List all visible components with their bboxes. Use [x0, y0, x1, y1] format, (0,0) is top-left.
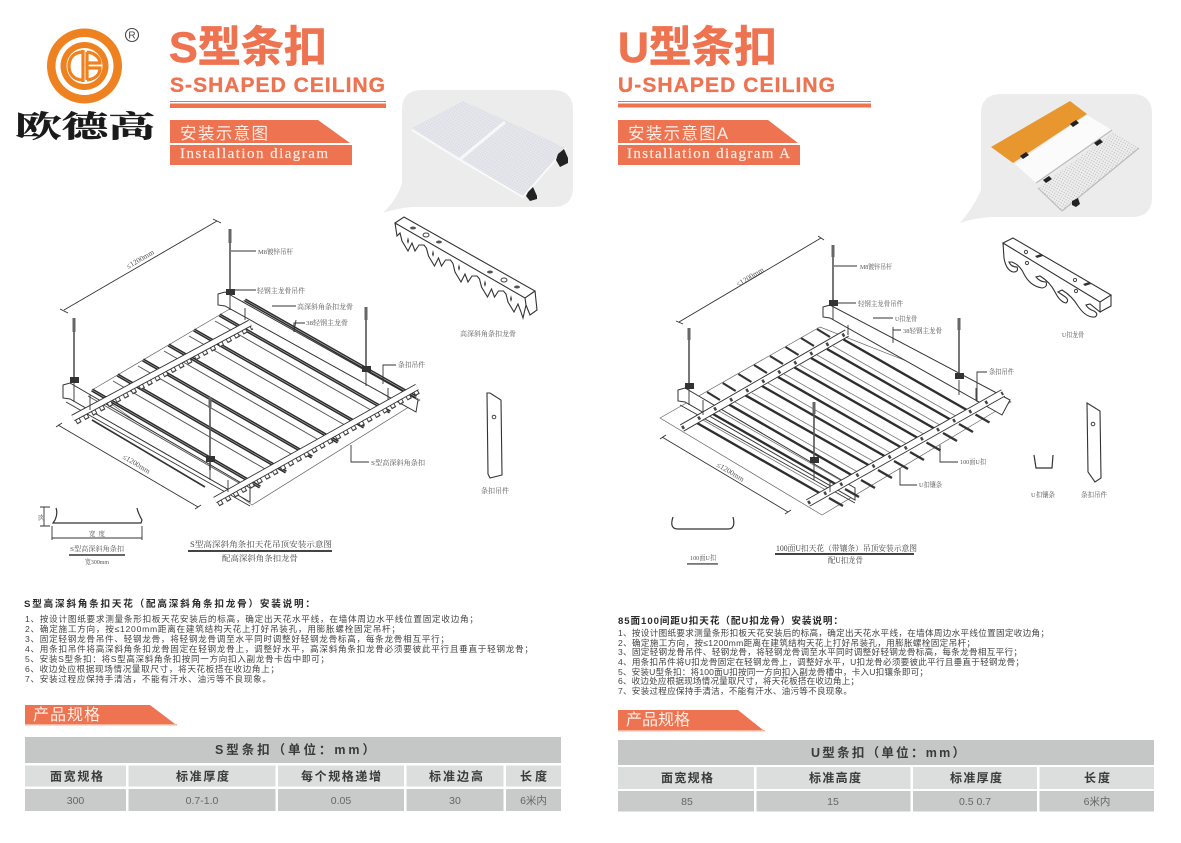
banner: installation diagram A: Installation diagram A	[627, 146, 790, 162]
subtitle: U-SHAPED CEILING: U-SHAPED CEILING	[618, 74, 835, 97]
isometric diagram: U ceiling: ≤1200mm	[715, 460, 746, 484]
labels: S diagram: 38轻钢主龙骨	[306, 318, 348, 327]
table: S specs	[25, 737, 561, 811]
instructions: S: S型高深斜角条扣天花（配高深斜角条扣龙骨）安装说明：	[24, 598, 315, 610]
profile: S strip	[38, 507, 142, 566]
heading rules U	[618, 101, 871, 108]
table: U specs: 15	[827, 796, 839, 808]
front carrier	[678, 388, 855, 500]
dimension lines	[660, 236, 824, 514]
banner: 产品规格 S	[25, 705, 177, 726]
instructions: S: 5、安装S型条扣：将S型高深斜角条扣按同一方向扣入副龙骨卡齿中即可；	[25, 653, 329, 664]
banner: 产品规格 U: 产品规格	[626, 711, 690, 729]
caption: S diagram: S型高深斜角条扣天花吊顶安装示意图	[190, 539, 332, 549]
title: U型条扣: U型条扣	[618, 24, 777, 72]
table: S specs: 0.05	[331, 795, 351, 807]
table: S specs: 标准边高	[429, 768, 483, 784]
instructions: U: 2、确定施工方向，按≤1200mm距离在建筑结构天花上打好吊装孔，用膨胀螺栓固定吊杆；	[618, 637, 975, 648]
strips	[92, 300, 416, 487]
labels: S diagram	[257, 247, 425, 467]
stubs	[829, 414, 990, 506]
labels: U diagram: 38轻钢主龙骨	[903, 326, 942, 335]
connector keel: U	[1003, 238, 1111, 339]
logo: 欧德高	[15, 28, 155, 146]
logo: 欧德高: R	[128, 31, 136, 42]
instructions: U: 3、固定轻钢龙骨吊件、轻钢龙骨，将轻钢龙骨调至水平同时调整好轻钢龙骨标高，每条龙骨相互平行；	[618, 646, 1022, 657]
labels: U diagram: U扣龙骨	[895, 314, 917, 323]
table: U specs: 长度	[1084, 770, 1110, 785]
labels: S diagram: 轻钢主龙骨吊件	[257, 286, 305, 295]
caption: S diagram	[188, 539, 332, 563]
labels: U diagram: 100面U扣	[960, 457, 986, 466]
labels: U diagram: 条扣吊件	[989, 367, 1014, 376]
instructions: U: 4、用条扣吊件将U扣龙骨固定在轻钢龙骨上，调整好水平，U扣龙骨必须要彼此平行且垂直于轻钢龙骨；	[618, 656, 1024, 667]
banner: installation diagram: 安装示意图	[180, 124, 268, 143]
isometric diagram: U ceiling: ≤1200mm	[734, 265, 766, 289]
isometric diagram: S ceiling	[56, 219, 420, 509]
caption: U diagram	[775, 543, 917, 565]
table: U specs: 0.5 0.7	[959, 796, 991, 808]
table: U specs: U型条扣（单位：mm）	[811, 745, 965, 760]
instructions: S: 1、按设计图纸要求测量条形扣板天花安装后的标高，确定出天花水平线，在墙体周边水平线位置固定收边角；	[25, 613, 478, 624]
photo bubble: U panels	[960, 94, 1152, 223]
photo bubble: S panel	[383, 90, 573, 213]
front carrier	[63, 383, 250, 502]
back carrier	[218, 292, 418, 412]
profile: S strip: 肉	[38, 513, 45, 522]
table: S specs: 0.7-1.0	[186, 795, 218, 807]
instructions: S: 3、固定轻钢龙骨吊件、轻钢龙骨，将轻钢龙骨调至水平同时调整好轻钢龙骨标高，每条龙骨相互平行；	[25, 633, 449, 644]
instructions: S: 7、安装过程应保持手清洁，不能有汗水、油污等不良现象。	[25, 673, 271, 684]
isometric diagram: U ceiling	[660, 236, 1011, 515]
labels: S diagram: 高深斜角条扣龙骨	[297, 302, 353, 311]
table: U specs: 85	[681, 796, 693, 808]
dimension lines	[56, 219, 221, 509]
table: U specs: 标准厚度	[950, 770, 1002, 785]
table: S specs: 300	[67, 795, 84, 807]
table: U specs	[618, 740, 1154, 812]
heading rules	[170, 101, 386, 108]
table: S specs: 长度	[520, 768, 547, 784]
instructions: U: 5、安装U型条扣：将100面U扣按同一方向扣入副龙骨槽中，卡入U扣镶条即可；	[618, 666, 928, 677]
rods	[689, 245, 959, 465]
labels: S diagram: S型高深斜角条扣	[371, 458, 425, 467]
instructions: U: 1、按设计图纸要求测量条形扣板天花安装后的标高，确定出天花水平线，在墙体周边水平线位置固定收边角；	[618, 627, 1049, 638]
keels	[76, 327, 419, 504]
instructions: U: 6、收边处应根据现场情况量取尺寸，将天花板搭在收边角上；	[618, 675, 859, 686]
instructions: S: 4、用条扣吊件将高深斜角条扣龙骨固定在轻钢龙骨上，调整好水平，高深斜角条扣龙骨必须要彼此平行且垂直于轻钢龙骨；	[25, 643, 533, 654]
instructions: S: 6、收边处应根据现场情况量取尺寸，将天花板搭在收边角上；	[25, 663, 279, 674]
subtitle: S-SHAPED CEILING: S-SHAPED CEILING	[170, 74, 385, 97]
hanger piece: S: 条扣吊件	[481, 486, 509, 495]
profile: S strip: 宽300mm	[85, 557, 110, 566]
title: S型条扣: S型条扣	[169, 24, 327, 72]
labels: S diagram: M8镀锌吊杆	[258, 247, 293, 256]
profile: U strip: 100面U扣	[690, 553, 716, 562]
labels: U diagram: U扣镶条	[919, 480, 942, 489]
connector keel: S	[395, 217, 537, 338]
banner: installation diagram: Installation diagram	[180, 146, 328, 162]
table: S specs: 面宽规格	[50, 768, 103, 784]
U clip strip: U扣镶条	[1031, 490, 1055, 499]
hanger rods	[74, 230, 366, 470]
hanger piece: U: 条扣吊件	[1081, 490, 1107, 499]
instructions: S	[24, 598, 533, 684]
connector keel: U: U扣龙骨	[1062, 330, 1084, 339]
caption: S diagram: 配高深斜角条扣龙骨	[222, 553, 298, 563]
table: U specs: 面宽规格	[661, 770, 713, 785]
hanger piece: U	[1081, 403, 1107, 499]
leaders	[834, 266, 987, 485]
strips	[697, 340, 970, 495]
banner: installation diagram	[170, 120, 352, 165]
table: S specs: S型条扣（单位：mm）	[215, 742, 375, 757]
logo: 欧德高: 欧德高	[15, 102, 155, 146]
connector keel: S: 高深斜角条扣龙骨	[460, 329, 516, 338]
profile: S strip: S型高深斜角条扣	[70, 544, 124, 553]
instructions: U	[618, 615, 1049, 696]
caption: U diagram: 配U扣龙骨	[828, 555, 863, 565]
table: S specs: 30	[449, 795, 461, 807]
instructions: U: 7、安装过程应保持手清洁，不能有汗水、油污等不良现象。	[618, 685, 852, 696]
banner: installation diagram A: 安装示意图A	[628, 124, 728, 143]
table: S specs: 6米内	[520, 794, 547, 807]
banner: 产品规格 S: 产品规格	[33, 706, 100, 724]
banner: 产品规格 U	[618, 710, 765, 732]
instructions: S: 2、确定施工方向，按≤1200mm距离在建筑结构天花上打好吊装孔，用膨胀螺栓固定吊杆；	[25, 623, 400, 634]
table: S specs: 每个规格递增	[301, 768, 381, 784]
table: S specs: 标准厚度	[176, 768, 229, 784]
isometric diagram: S ceiling: ≤1200mm	[121, 452, 152, 476]
isometric diagram: S ceiling: ≤1200mm	[124, 247, 156, 271]
table: U specs: 6米内	[1084, 795, 1110, 808]
labels: U diagram	[858, 262, 1014, 489]
keels	[682, 333, 1003, 503]
labels: S diagram: 条扣吊件	[398, 360, 425, 369]
caption: U diagram: 100面U扣天花（带镶条）吊顶安装示意图	[776, 543, 917, 553]
U clip strip	[1031, 455, 1055, 499]
labels: U diagram: M8镀锌吊杆	[860, 262, 892, 271]
leader lines	[231, 251, 396, 462]
banner: installation diagram A	[618, 120, 800, 165]
labels: U diagram: 轻钢主龙骨吊件	[858, 299, 903, 308]
profile: U strip	[672, 517, 734, 565]
profile: S strip: 宽度	[89, 529, 105, 538]
table: U specs: 标准高度	[809, 770, 861, 785]
instructions: U: 85面100间距U扣天花（配U扣龙骨）安装说明：	[618, 615, 843, 627]
back carrier	[823, 305, 1010, 415]
hanger piece: S	[481, 393, 509, 495]
